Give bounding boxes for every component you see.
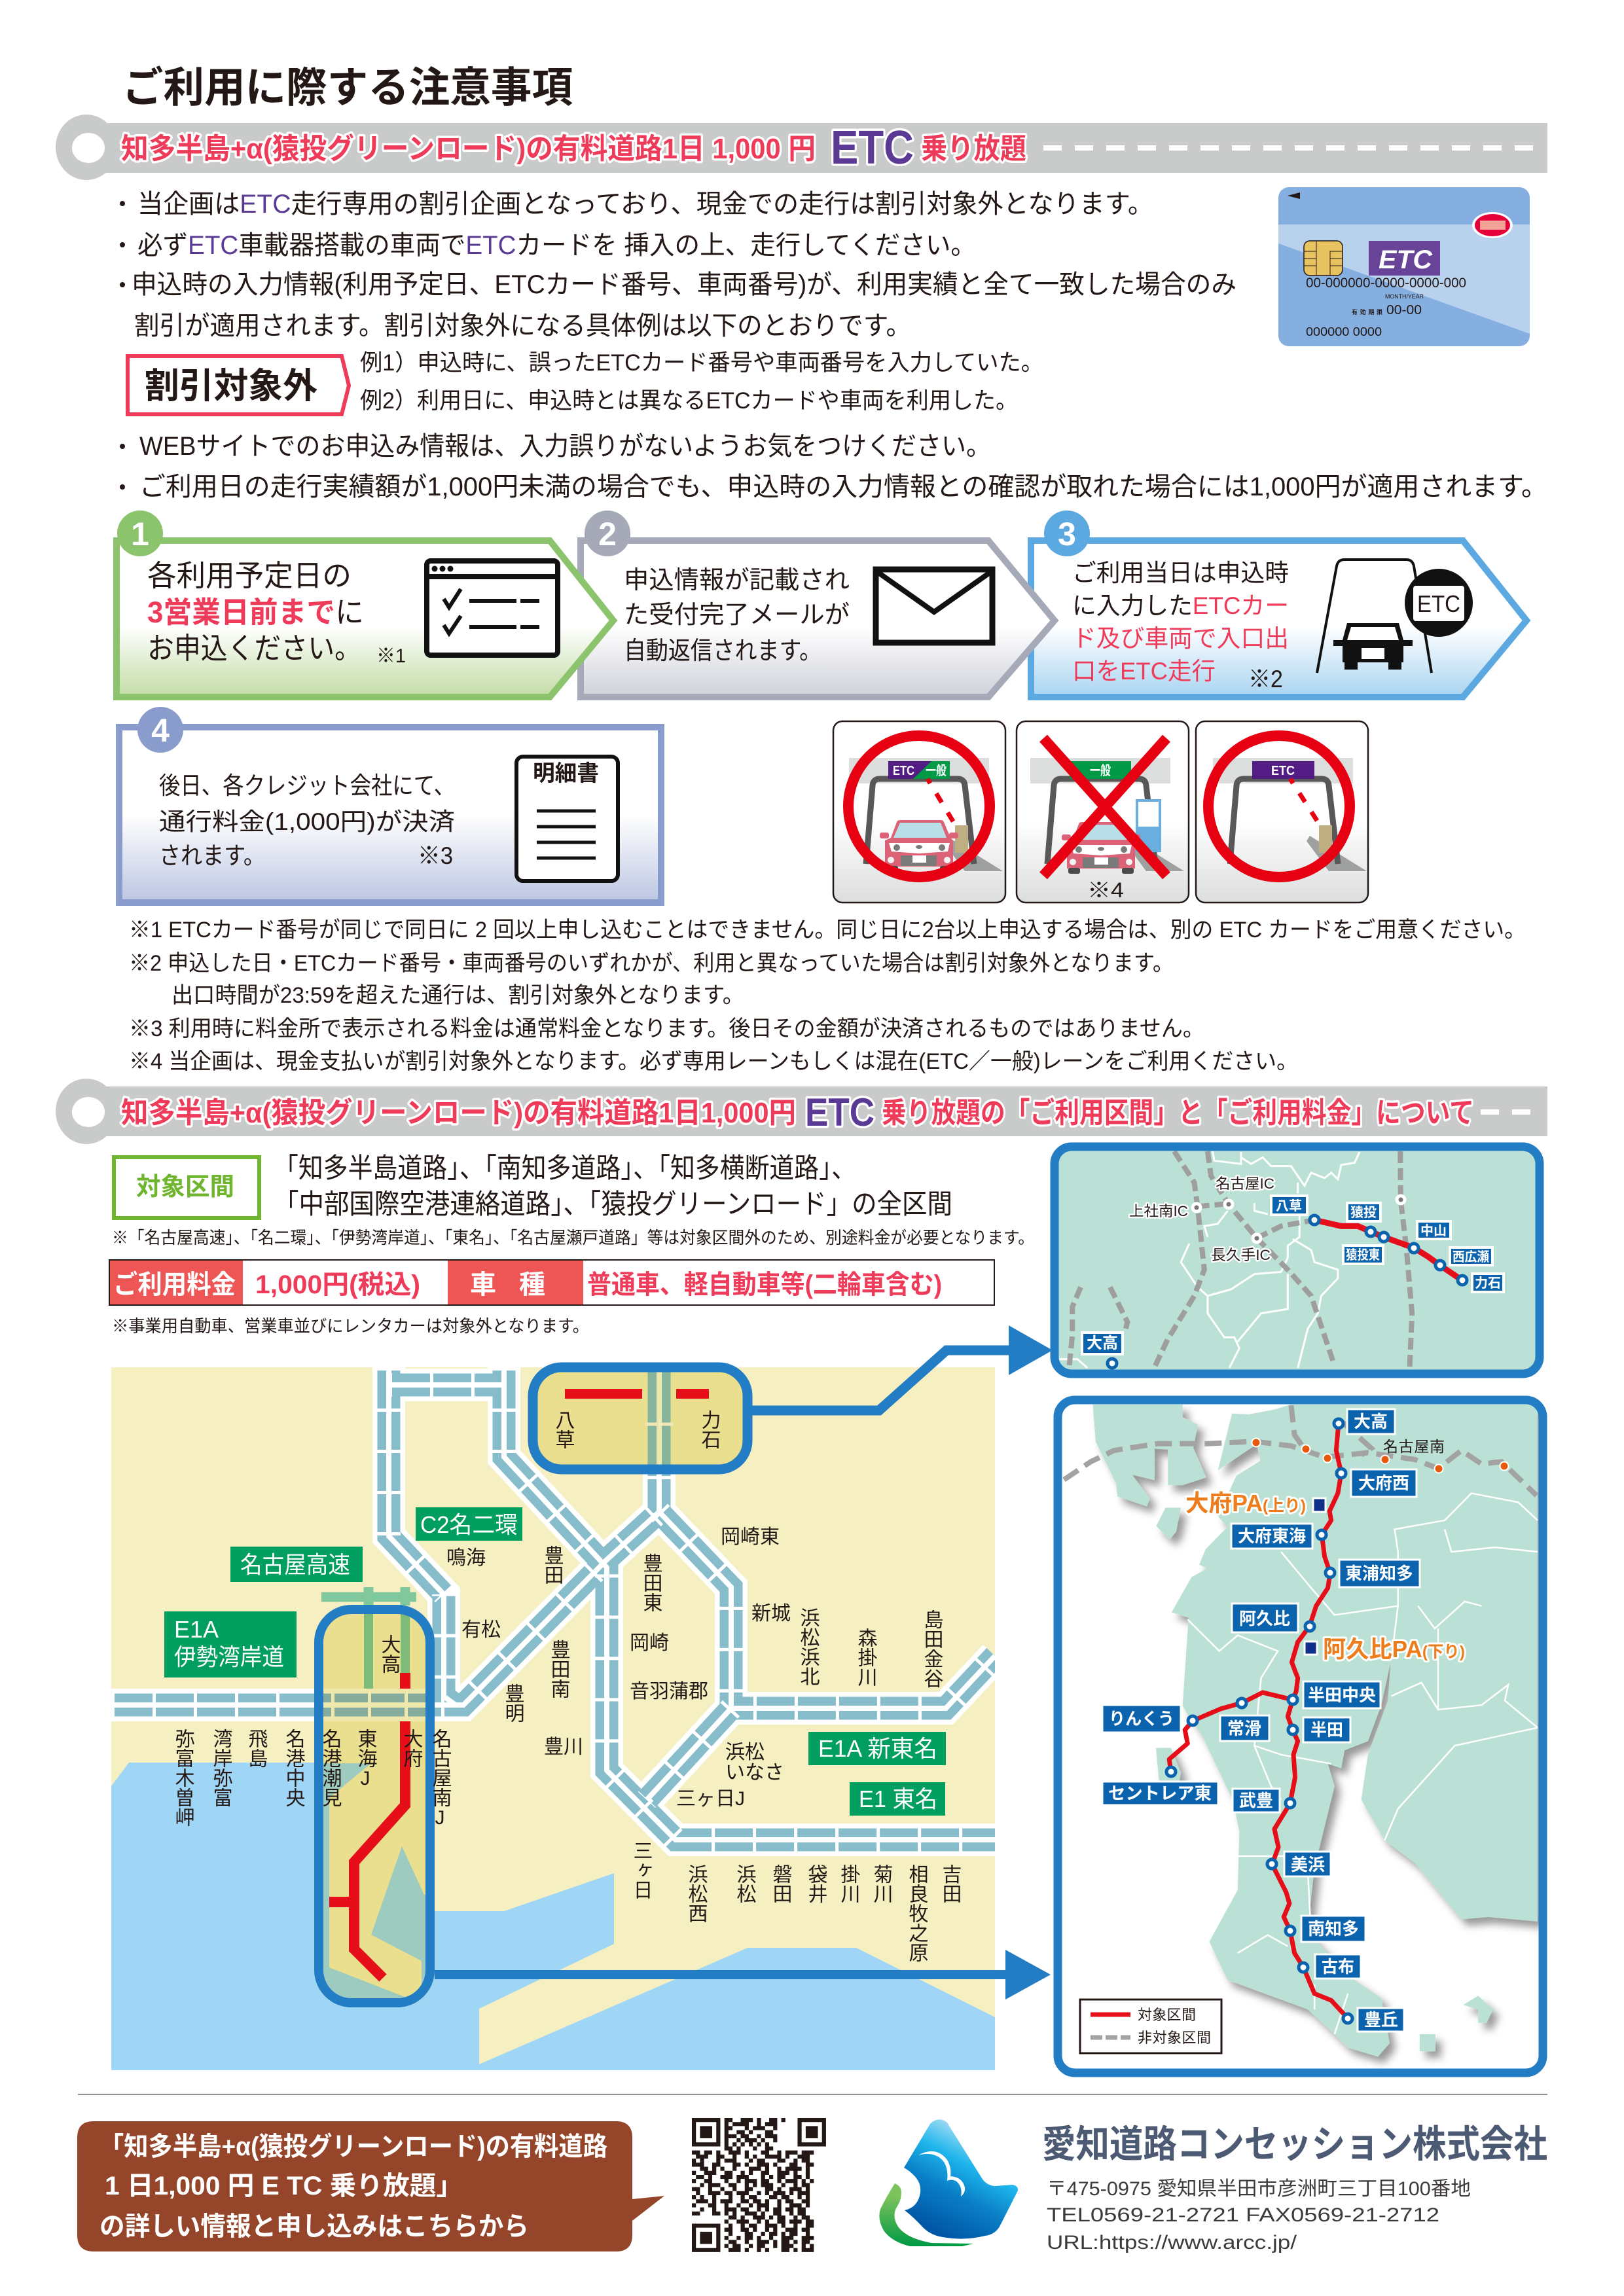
- step 2 panel: 申込情報が記載され: [624, 567, 850, 594]
- step 3 panel: ド及び車両で入口出: [1072, 625, 1289, 652]
- step 3 panel: ご利用当日は申込時: [1072, 560, 1289, 586]
- step 3 panel: 3: [1058, 516, 1076, 552]
- step 2 panel: 自動返信されます。: [624, 637, 821, 665]
- company address: TEL0569-21-2721 FAX0569-21-2712: [1047, 2204, 1439, 2226]
- section bar: 1日1,000円 ETC乗り放題: ETC: [831, 122, 914, 174]
- step 3 panel: ※2: [1248, 666, 1283, 692]
- section bar: 1日1,000円 ETC乗り放題: 知多半島+α(猿投グリーンロード)の有料道路1日 1,000 円: [121, 133, 816, 165]
- step 1 panel: 1: [131, 516, 149, 552]
- notes list: ご利用日の走行実績額が1,000円未満の場合でも、申込時の入力情報との確認が取れた場合には1,000円が適用されます。: [139, 473, 1547, 501]
- icon: envelope: [876, 569, 992, 643]
- interchange names: 豊田南: [547, 1640, 569, 1698]
- icon: ETC gate with car: ETC: [1417, 590, 1460, 617]
- fee table: 1,000円(税込): [255, 1270, 420, 1299]
- interchange names: 浜松浜北: [797, 1607, 820, 1686]
- examples: 例1）申込時に、誤ったETCカード番号や車両番号を入力していた。: [360, 350, 1043, 376]
- callout: 割引対象外: 割引対象外: [145, 367, 317, 406]
- step 3 panel: に入力したETCカー: [1072, 592, 1289, 619]
- IC label text: 阿久比: [1239, 1609, 1290, 1628]
- card: ETC lane: ETC: [1271, 764, 1295, 778]
- step 1 panel: 3営業日前までに: [147, 596, 364, 629]
- label: E1A 伊勢湾岸道: 伊勢湾岸道: [174, 1643, 284, 1670]
- IC names: 長久手IC: [1211, 1247, 1271, 1263]
- label: 名古屋高速: [230, 1547, 363, 1582]
- IC label text: 南知多: [1308, 1919, 1359, 1939]
- target roads text: 「知多半島道路」、「南知多道路」、「知多横断道路」、: [274, 1153, 856, 1183]
- highway: Nagoya Expressway spur: [321, 1587, 416, 1605]
- interchange names: 東海J: [355, 1729, 377, 1789]
- notes list: 割引が適用されます。割引対象外になる具体例は以下のとおりです。: [134, 312, 911, 340]
- interchange names: 掛川: [838, 1864, 860, 1903]
- frame: [1058, 1400, 1543, 2073]
- fee table: [109, 1260, 994, 1305]
- icon: ETC card: MONTH/YEAR: [1385, 293, 1424, 300]
- interchange names: 袋井: [805, 1864, 827, 1903]
- label: E1 東名: [850, 1782, 945, 1816]
- IC label text: 大府西: [1358, 1473, 1409, 1493]
- interchange names: 森掛川: [855, 1628, 877, 1687]
- IC names: 名古屋IC: [1216, 1175, 1274, 1192]
- section bar: 1日1,000円 ETC乗り放題: [56, 115, 1547, 180]
- IC label text: 東浦知多: [1345, 1564, 1413, 1583]
- icon: ETC card: [1278, 187, 1530, 346]
- company name: 愛知道路コンセッション株式会社: [1042, 2123, 1547, 2166]
- footnotes: ※4 当企画は、現金支払いが割引対象外となります。必ず専用レーンもしくは混在(ETC／一般)レーンをご利用ください。: [129, 1049, 1298, 1074]
- examples: [360, 350, 1043, 414]
- notes list: 申込時の入力情報(利用予定日、ETCカード番号、車両番号)が、利用実績と全て一致した場合のみ: [132, 270, 1236, 299]
- interchange names: 飛島: [245, 1729, 268, 1768]
- company address: [1047, 2178, 1471, 2253]
- notes list: 必ずETC車載器搭載の車両でETCカードを 挿入の上、走行してください。: [137, 231, 976, 260]
- examples: 例2）利用日に、申込時とは異なるETCカードや車両を利用した。: [360, 388, 1018, 414]
- IC nodes: [1166, 1419, 1352, 2023]
- IC label text: りんくう: [1109, 1709, 1174, 1729]
- frame: left highlight: [319, 1609, 430, 2003]
- IC label text: 古布: [1322, 1957, 1354, 1977]
- footnotes: 出口時間が23:59を超えた通行は、割引対象外となります。: [171, 983, 744, 1008]
- icon: ETC card: 00-000000-0000-0000-000: [1306, 276, 1466, 291]
- footnotes: [129, 918, 1526, 1074]
- interchange names: 豊明: [501, 1683, 524, 1723]
- step 4 panel: 後日、各クレジット会社にて、: [159, 772, 455, 799]
- footnotes: ※1 ETCカード番号が同じで同日に 2 回以上申し込むことはできません。同じ日に2台以上申込する場合は、別の ETC カードをご用意ください。: [129, 918, 1526, 942]
- icon: statement: 明細書: [533, 761, 599, 786]
- detail map: north: 西広瀬: [1453, 1249, 1489, 1265]
- section bar: 利用区間と利用料金: [56, 1079, 1547, 1144]
- interchange names: 力石: [698, 1410, 721, 1449]
- notes list: [120, 190, 1547, 501]
- fee table: ご利用料金: [113, 1270, 236, 1299]
- frame: [1055, 1147, 1540, 1374]
- arrow to south map: [435, 1950, 1051, 2000]
- interchange names: 名港潮見: [319, 1729, 342, 1807]
- legend: 対象区間: [1138, 2007, 1196, 2023]
- target roads text: 「中部国際空港連絡道路」、「猿投グリーンロード」の全区間: [274, 1189, 952, 1219]
- footnotes: ※2 申込した日・ETCカード番号・車両番号のいずれかが、利用と異なっていた場合は割引対象外となります。: [129, 951, 1174, 976]
- step 2 panel: 2: [598, 516, 617, 552]
- frame: top highlight: [533, 1367, 748, 1469]
- label: E1A 新東名: E1A 新東名: [818, 1735, 937, 1762]
- section bar: 利用区間と利用料金: 乗り放題の「ご利用区間」と「ご利用料金」について: [882, 1097, 1474, 1129]
- callout: application info: 「知多半島+α(猿投グリーンロード)の有料道路: [99, 2132, 607, 2161]
- route map: [111, 1325, 1053, 2070]
- interchange names: 有松: [461, 1619, 501, 1641]
- notes list: WEBサイトでのお申込み情報は、入力誤りがないようお気をつけください。: [139, 432, 991, 461]
- IC label text: 豊丘: [1364, 2010, 1398, 2030]
- highlighted area: Yakusa to Chikaraishi: [535, 1365, 745, 1471]
- interchange names: 島田金谷: [920, 1609, 943, 1688]
- interchange names: 名港中央: [283, 1729, 305, 1807]
- JCT dots: [1252, 1439, 1508, 1473]
- card: general lane crossed out: ※4: [1087, 878, 1124, 902]
- icon: ETC card: ETC: [1379, 245, 1433, 274]
- icon: ETC card: 有効期限: [1352, 308, 1382, 315]
- detail map: Chita peninsula: [1058, 1400, 1543, 2073]
- label: E1 東名: E1 東名: [859, 1785, 937, 1812]
- IC names: [1129, 1175, 1274, 1263]
- icon: statement: [516, 757, 618, 881]
- detail map: north: 八草: [1276, 1198, 1302, 1213]
- detail map: north: 中山: [1420, 1223, 1447, 1238]
- card: general lane crossed out: [1017, 721, 1189, 903]
- label: 対象区間: [114, 1157, 259, 1218]
- label: E1A 伊勢湾岸道: [164, 1611, 297, 1677]
- interchange names: 音羽蒲郡: [630, 1681, 708, 1702]
- interchange names: 三ヶ日J: [676, 1788, 745, 1810]
- interchange names: 名古屋南J: [429, 1729, 452, 1829]
- step 1 panel: ※1: [376, 645, 406, 667]
- PA label: 大府PA: 大府PA(上り): [1185, 1490, 1306, 1516]
- IC label text: 大高: [1354, 1412, 1388, 1431]
- fee table: 車 種: [470, 1270, 545, 1299]
- interchange names: 浜松西: [685, 1864, 708, 1923]
- interchange names: 岡崎東: [721, 1526, 780, 1548]
- QR code: [692, 2118, 826, 2252]
- icon: checklist window: [427, 561, 558, 655]
- icon: ETC card: 00-00: [1386, 303, 1422, 317]
- step 4 panel: されます。: [159, 842, 265, 869]
- interchange names: 新城: [751, 1603, 791, 1624]
- interchange names: 岡崎: [630, 1632, 669, 1654]
- note: vehicle exclusions: ※事業用自動車、営業車並びにレンタカーは対象外となります。: [112, 1316, 589, 1336]
- interchange names: いなさ: [725, 1762, 784, 1784]
- arrow to north map: [752, 1325, 1053, 1410]
- interchange names: 豊田東: [640, 1553, 662, 1612]
- step 1 panel: 各利用予定日の: [147, 559, 352, 592]
- IC label text: 常滑: [1227, 1719, 1261, 1738]
- IC label text: 大府東海: [1238, 1526, 1306, 1546]
- IC label text: [1108, 1412, 1413, 2030]
- step 3 panel: 口をETC走行: [1072, 658, 1216, 685]
- IC label boxes: [1102, 1409, 1420, 2032]
- toll section in red: [329, 1673, 405, 1978]
- card: mixed lane: ETC: [893, 764, 914, 778]
- interchange names: 豊川: [544, 1736, 583, 1758]
- IC label text: 半田: [1310, 1720, 1343, 1740]
- company address: 〒475-0975 愛知県半田市彦洲町三丁目100番地: [1047, 2178, 1471, 2200]
- station labels: [1082, 1196, 1504, 1354]
- logo: [879, 2119, 1018, 2246]
- nodes: [1108, 1215, 1467, 1368]
- callout: application info: [77, 2121, 664, 2251]
- interchange names: 浜松: [725, 1742, 765, 1763]
- interchange names: 豊田: [541, 1545, 563, 1585]
- step 1 panel: [117, 511, 613, 697]
- card: general lane crossed out: 一般: [1090, 763, 1111, 778]
- callout: application info: の詳しい情報と申し込みはこちらから: [99, 2212, 529, 2241]
- target roads text: [274, 1153, 952, 1219]
- fee table: 普通車、軽自動車等(二輪車含む): [587, 1270, 942, 1299]
- IC label text: セントレア東: [1108, 1784, 1212, 1803]
- detail map: north: [1055, 1147, 1540, 1374]
- IC label text: 美浜: [1291, 1855, 1325, 1874]
- interchange names: 大高: [378, 1634, 401, 1674]
- section bar: 利用区間と利用料金: ETC: [805, 1090, 875, 1134]
- step 4 panel: [119, 707, 661, 903]
- note: out of scope roads: ※「名古屋高速」、「名二環」、「伊勢湾岸道」、「東名」、「名古屋瀬戸道路」等は対象区間外のため、別途料金が必要となります。: [112, 1228, 1034, 1247]
- label: 名古屋高速: 名古屋高速: [240, 1551, 350, 1578]
- legend: [1080, 2000, 1221, 2053]
- step 4 panel: 通行料金(1,000円)が決済: [159, 808, 455, 835]
- section bar: 1日1,000円 ETC乗り放題: 乗り放題: [921, 133, 1026, 165]
- IC label text: 武豊: [1239, 1791, 1273, 1810]
- divider: [78, 2094, 1547, 2095]
- step 4 panel: ※3: [418, 842, 453, 869]
- interchange names: 磐田: [770, 1864, 792, 1903]
- section bar: 利用区間と利用料金: 知多半島+α(猿投グリーンロード)の有料道路1日1,000円: [121, 1097, 796, 1129]
- JCT name: 名古屋南: [1383, 1438, 1445, 1455]
- title: ご利用に際する注意事項: [122, 64, 573, 111]
- interchange names: 湾岸弥富: [209, 1729, 232, 1807]
- interchange names: 三ヶ日: [630, 1840, 652, 1899]
- callout: 割引対象外: [128, 356, 349, 414]
- highlighted area: Nagoya: [323, 1610, 435, 2003]
- detail map: north: 大高: [1087, 1335, 1118, 1352]
- IC label text: 半田中央: [1308, 1685, 1376, 1705]
- PA label: 阿久比PA: 阿久比PA(下り): [1323, 1636, 1465, 1662]
- label: C2 名二環: C2名二環: [420, 1511, 518, 1538]
- label: E1A 伊勢湾岸道: E1A: [174, 1616, 219, 1643]
- legend: 非対象区間: [1138, 2030, 1211, 2046]
- card: ETC lane: [1196, 721, 1368, 903]
- card: mixed lane: [833, 721, 1005, 903]
- callout: application info: 1 日1,000 円 E TC 乗り放題」: [105, 2172, 463, 2200]
- company address: URL:https://www.arcc.jp/: [1047, 2232, 1297, 2253]
- footnotes: ※3 利用時に料金所で表示される料金は通常料金となります。後日その金額が決済されるものではありません。: [129, 1016, 1204, 1041]
- interchange names: 大府: [401, 1729, 423, 1768]
- step 2 panel: た受付完了メールが: [624, 601, 850, 629]
- icon: ETC gate with car: [1317, 560, 1473, 673]
- interchange names: 浜松: [733, 1864, 757, 1903]
- notes list: 当企画はETC走行専用の割引企画となっており、現金での走行は割引対象外となります。: [137, 190, 1153, 219]
- interchange names: 吉田: [939, 1864, 961, 1903]
- interchange names: 弥富木曽岬: [171, 1729, 195, 1827]
- detail map: north: 猿投: [1350, 1205, 1377, 1220]
- step 2 panel: [581, 511, 1055, 697]
- step 1 panel: お申込ください。: [147, 632, 361, 665]
- interchange names: 八草: [552, 1410, 575, 1449]
- interchange names: [171, 1410, 961, 1962]
- interchange names: 菊川: [871, 1864, 893, 1903]
- interchange names: 相良牧之原: [906, 1864, 928, 1962]
- icon: ETC card: 000000 0000: [1306, 325, 1382, 338]
- IC names: 上社南IC: [1129, 1203, 1188, 1219]
- card: mixed lane: 一般: [926, 763, 947, 778]
- label: 対象区間: 対象区間: [136, 1174, 234, 1201]
- detail map: north: 力石: [1475, 1276, 1501, 1291]
- interchange names: 鳴海: [446, 1547, 486, 1569]
- detail map: north: 猿投東: [1346, 1247, 1380, 1263]
- step 4 panel: 4: [151, 712, 170, 749]
- step 3 panel: [1031, 511, 1526, 697]
